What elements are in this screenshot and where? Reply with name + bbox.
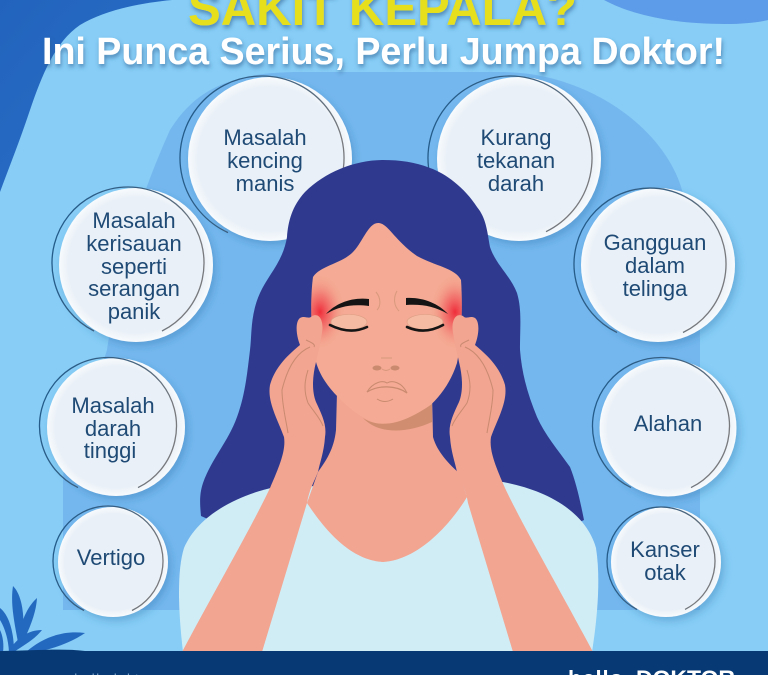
mouth: [367, 382, 407, 402]
circle: Alahan: Alahan: [634, 411, 702, 436]
circle: Kurang tekanan darah: tekanan: [477, 148, 555, 173]
circle: Masalah kencing manis: Masalah: [223, 125, 307, 150]
neck and chest: [307, 392, 467, 562]
circle: Masalah kencing manis: manis: [236, 171, 294, 196]
circle: Gangguan dalam telinga: Gangguan: [604, 230, 706, 255]
right arm and hand: [450, 315, 593, 652]
shirt: [179, 482, 598, 652]
circle: Gangguan dalam telinga: [574, 188, 735, 342]
subtitle: Ini Punca Serius, Perlu Jumpa Doktor!: [42, 31, 725, 73]
circle: Kurang tekanan darah: darah: [488, 171, 544, 196]
circle: Kanser otak: [607, 507, 721, 617]
temple pain glow: [311, 282, 462, 342]
circle: Masalah kerisauan: serangan: [88, 276, 180, 301]
eyes closed: [330, 325, 443, 331]
background: dark blue corner: [0, 0, 172, 192]
nose: [372, 358, 400, 370]
hair: [200, 160, 584, 560]
circle: Gangguan dalam telinga: telinga: [623, 276, 688, 301]
circle: Masalah kerisauan: [52, 187, 213, 342]
forehead frown lines: [376, 291, 399, 311]
circle: Gangguan dalam telinga: dalam: [625, 253, 685, 278]
circle: Masalah darah tinggi: [40, 358, 185, 496]
background: top right blob: [604, 0, 768, 24]
circle: Masalah kerisauan: panik: [108, 299, 161, 324]
circle: Masalah kerisauan: kerisauan: [86, 231, 182, 256]
circle: Masalah darah tinggi: tinggi: [84, 438, 136, 463]
circle: Masalah kerisauan: seperti: [101, 254, 167, 279]
illustration: woman with headache: [179, 160, 598, 652]
circle: Alahan: [593, 358, 736, 496]
circle: Masalah kerisauan: Masalah: [92, 208, 176, 233]
icon: plant leaves: [0, 586, 85, 652]
circle: Masalah kencing manis: [180, 76, 352, 241]
face: [311, 223, 462, 425]
circle: Kurang tekanan darah: Kurang: [481, 125, 551, 150]
background: mid blue panel: [63, 72, 700, 610]
circle: Masalah kencing manis: kencing: [227, 148, 303, 173]
circle: Vertigo: [53, 506, 168, 617]
circle: Masalah darah tinggi: Masalah: [71, 393, 155, 418]
circle: Kanser otak: Kanser: [630, 537, 700, 562]
chin shadow: [363, 404, 432, 430]
left arm and hand: [182, 315, 325, 652]
circle: Kurang tekanan darah: [428, 76, 601, 241]
circle: Kanser otak: otak: [644, 560, 687, 585]
eyelids: [331, 314, 443, 330]
circle: Vertigo: Vertigo: [77, 545, 145, 570]
circle: Masalah darah tinggi: darah: [85, 416, 141, 441]
footer bar: [0, 650, 768, 675]
eyebrows: [326, 298, 448, 314]
